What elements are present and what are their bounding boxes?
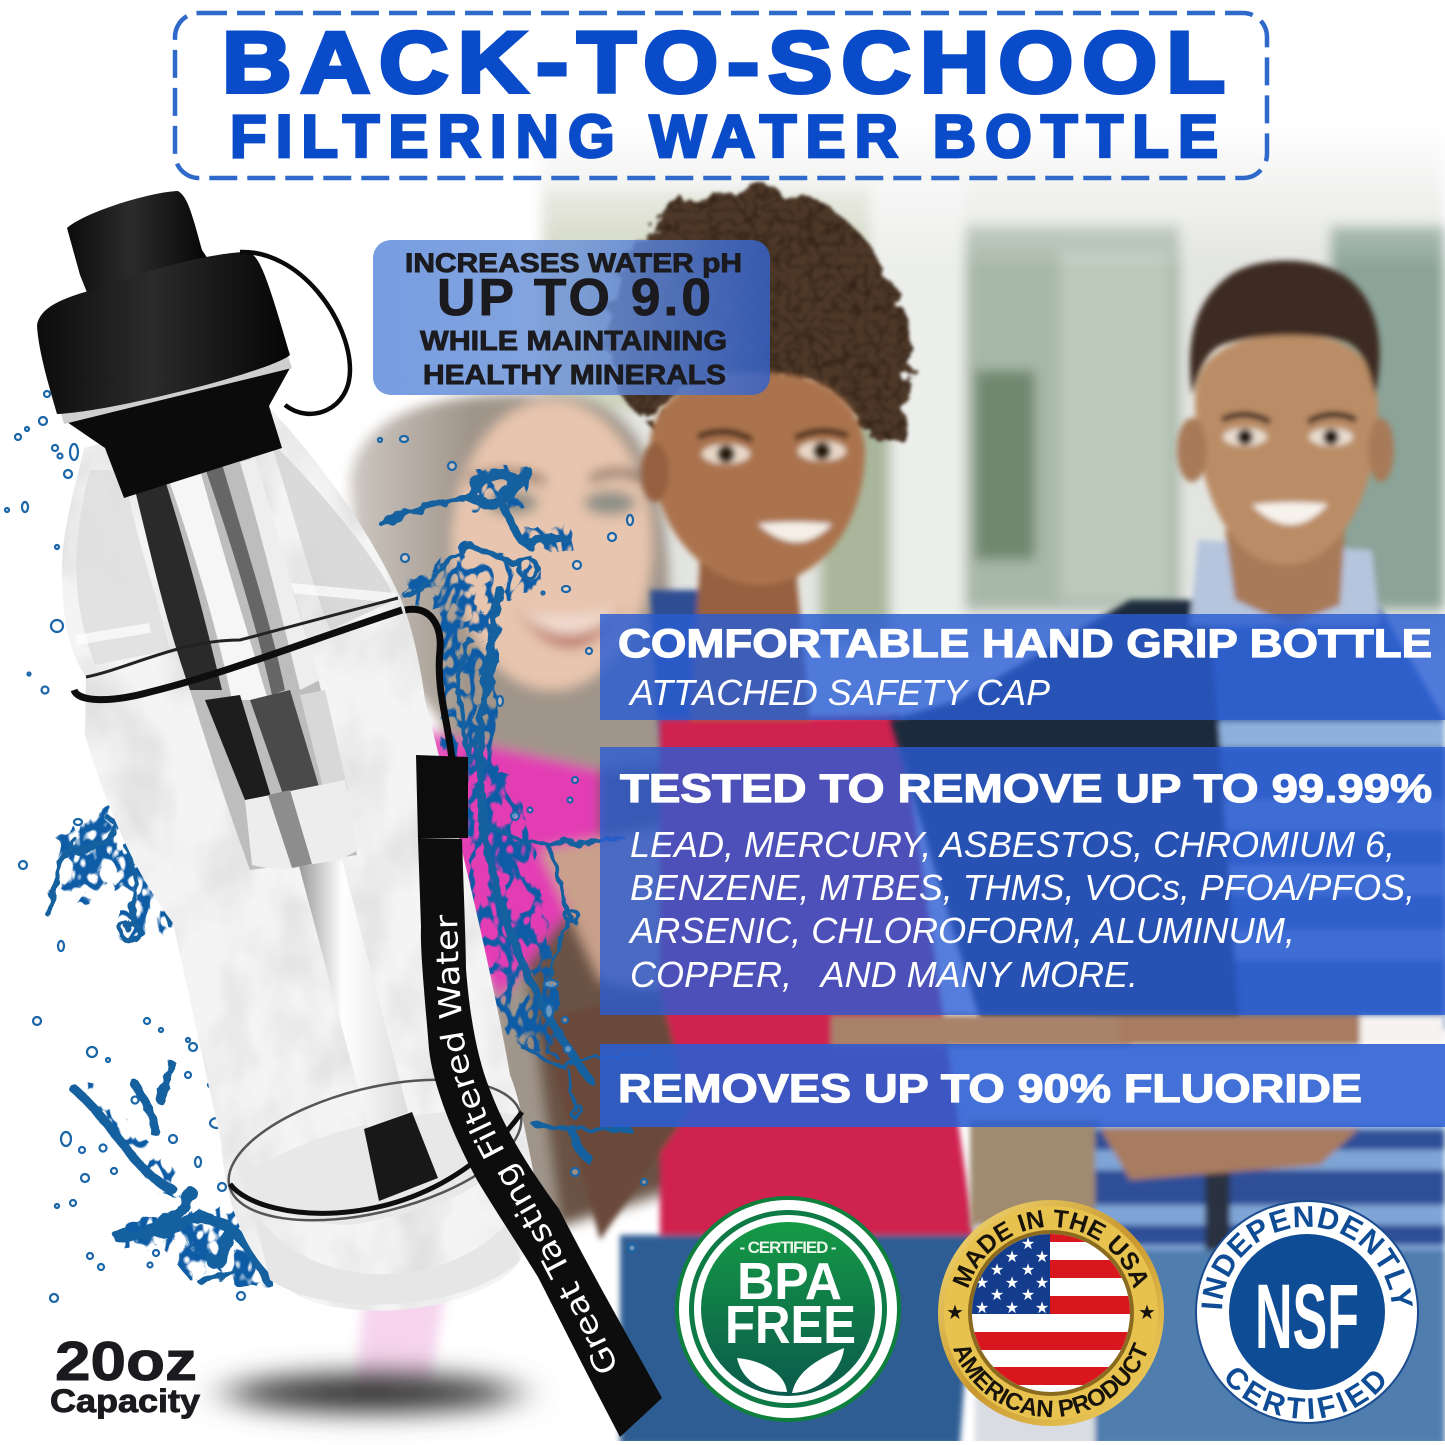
- middle girl hair: [609, 187, 911, 438]
- middle girl body: [540, 560, 975, 1445]
- panel heading: TESTED TO REMOVE UP TO 99.99%: [620, 767, 1432, 811]
- bottle cap: [37, 191, 350, 414]
- side stars: ★: [1138, 1300, 1156, 1324]
- middle girl face: [641, 372, 865, 585]
- shadow under bottle: [197, 1369, 547, 1417]
- contaminant list: LEAD, MERCURY, ASBESTOS, CHROMIUM 6,: [630, 824, 1395, 865]
- flag: ★: [990, 1260, 1004, 1279]
- badge: BPA free: [675, 1196, 901, 1422]
- pH callout: [373, 240, 770, 395]
- title line 1: BACK-TO-SCHOOL: [222, 15, 1234, 111]
- certified: - CERTIFIED -: [740, 1238, 836, 1257]
- bottle filter tube: [135, 455, 408, 1129]
- building wall and windows: [540, 130, 1445, 660]
- hands and lower shirts: [830, 1015, 1445, 1445]
- contaminant list: BENZENE, MTBES, THMS, VOCs, PFOA/PFOS,: [630, 867, 1415, 908]
- dashed border: [175, 13, 1267, 178]
- independently arc: INDEPENDENTLY: [1201, 1206, 1413, 1309]
- side stars: [946, 1300, 1156, 1324]
- capacity label: [50, 1330, 200, 1419]
- contaminant list: ARSENIC, CHLOROFORM, ALUMINUM,: [628, 910, 1295, 951]
- badge: NSF independently certified: [1195, 1200, 1419, 1424]
- flag: ★: [1021, 1234, 1035, 1253]
- flag: ★: [1035, 1273, 1049, 1292]
- flag: ★: [975, 1298, 989, 1317]
- text: increases water pH: INCREASES WATER pH: [405, 248, 742, 278]
- text: capacity: Capacity: [50, 1383, 200, 1419]
- contaminant list: COPPER, AND MANY MORE.: [630, 954, 1138, 995]
- bottle tube end: [364, 1112, 438, 1201]
- water droplets: [5, 391, 647, 1302]
- panel subtext: ATTACHED SAFETY CAP: [628, 672, 1050, 713]
- american product arc: AMERICAN PRODUCT: [953, 1342, 1147, 1418]
- badge: made in the USA: [938, 1200, 1164, 1426]
- contaminant list: [628, 824, 1415, 995]
- panel: fluoride: [600, 1044, 1445, 1127]
- bottle neck and rings: [60, 356, 536, 1246]
- flag: ★: [975, 1273, 989, 1292]
- product: filtering water bottle: [37, 191, 662, 1437]
- flag: ★: [1021, 1285, 1035, 1304]
- wrist strap: [404, 606, 662, 1437]
- pink leg: [355, 1290, 445, 1390]
- boy: [890, 261, 1445, 1030]
- BPA: BPA: [737, 1253, 842, 1311]
- title line 2: FILTERING WATER BOTTLE: [230, 103, 1218, 170]
- panel: tested contaminants: [600, 747, 1445, 1015]
- made in the USA arc: MADE IN THE USA: [952, 1210, 1148, 1289]
- panel heading: REMOVES UP TO 90% FLUORIDE: [618, 1067, 1362, 1111]
- flag: ★: [1035, 1247, 1049, 1266]
- flag: ★: [1021, 1260, 1035, 1279]
- splash strands: [50, 472, 650, 1281]
- strap lettering: Great Tasting Filtered Water: [436, 914, 615, 1372]
- flag: ★: [1005, 1298, 1019, 1317]
- water splash: [5, 391, 650, 1302]
- panel heading: COMFORTABLE HAND GRIP BOTTLE: [618, 622, 1432, 666]
- side stars: ★: [946, 1300, 964, 1324]
- flag: [970, 1232, 1135, 1397]
- flag: ★: [1035, 1298, 1049, 1317]
- white fade over left side: [0, 100, 470, 1445]
- text: 20oz: 20oz: [55, 1330, 197, 1392]
- flag: ★: [990, 1285, 1004, 1304]
- certified arc: CERTIFIED: [1226, 1368, 1384, 1419]
- title banner: [175, 13, 1267, 178]
- top white fade: [0, 0, 1445, 270]
- text: while maintaining: WHILE MAINTAINING: [420, 325, 727, 356]
- text: up to 9.0: UP TO 9.0: [437, 269, 714, 327]
- NSF: NSF: [1255, 1266, 1359, 1368]
- FREE: FREE: [725, 1295, 856, 1355]
- splash sheets: [58, 465, 570, 1290]
- leaves icon: [737, 1348, 844, 1393]
- flag: ★: [1005, 1247, 1019, 1266]
- panel: comfortable hand grip: [600, 614, 1445, 720]
- left girl: [350, 394, 720, 1240]
- text: healthy minerals: HEALTHY MINERALS: [423, 359, 726, 390]
- bottle body: [62, 398, 537, 1311]
- flag: ★: [1005, 1273, 1019, 1292]
